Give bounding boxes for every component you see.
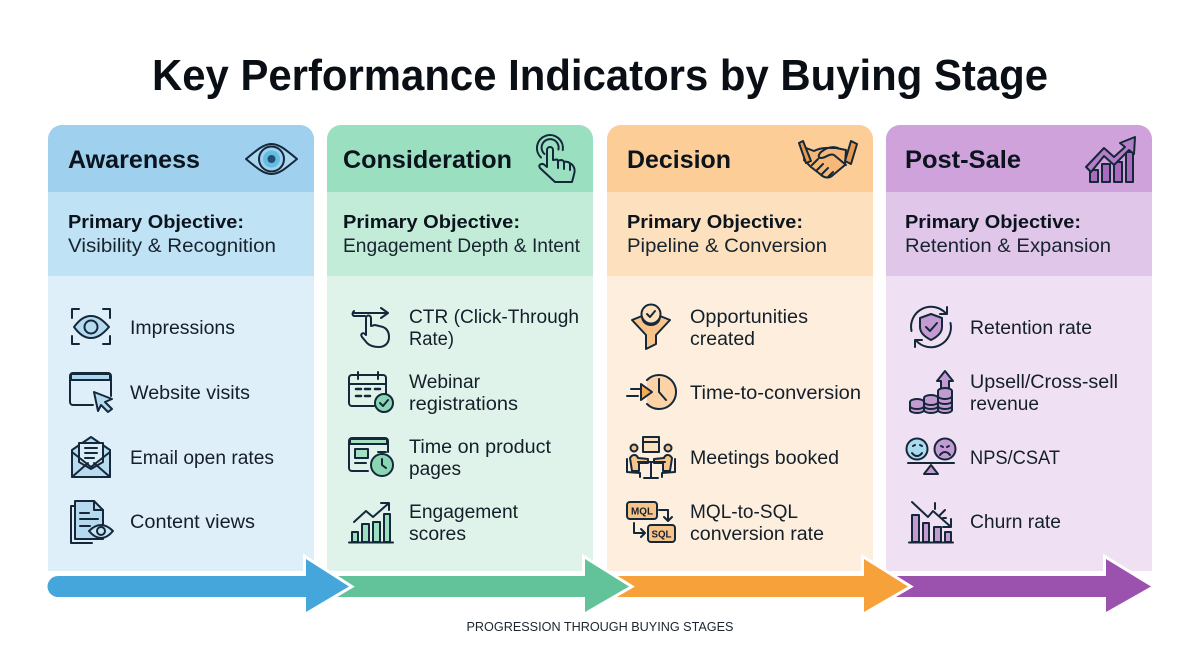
kpi: ctr: Rate) xyxy=(409,329,454,350)
icon: click arrow xyxy=(352,308,389,347)
icon: balance faces xyxy=(906,438,956,474)
kpi: engagement scores xyxy=(349,502,519,545)
kpi: meetings booked: Meetings booked xyxy=(690,448,839,469)
icon: falling chart xyxy=(909,502,953,542)
kpi: website visits: Website visits xyxy=(130,383,250,404)
kpi: email open rates: Email open rates xyxy=(130,448,274,469)
heading: post-sale: Post-Sale xyxy=(905,146,1021,174)
objective: consideration: Engagement Depth & Intent xyxy=(343,235,581,257)
kpi: time on product pages: Time on product xyxy=(409,437,552,458)
kpi: email open rates xyxy=(72,437,274,477)
kpi: mql to sql xyxy=(627,502,824,545)
objective: decision: Primary Objective: xyxy=(627,212,803,232)
icon: funnel check xyxy=(632,304,670,349)
kpi: mql to sql: MQL-to-SQL xyxy=(690,502,798,523)
icon: clock arrows xyxy=(627,375,676,409)
consideration background xyxy=(327,125,593,571)
kpi: upsell revenue xyxy=(910,371,1118,415)
icon: mql sql xyxy=(627,502,675,542)
kpi: retention rate xyxy=(911,307,1092,347)
kpi: opportunities created xyxy=(632,304,808,350)
objective: awareness: Primary Objective: xyxy=(68,212,244,232)
objective: post-sale: Retention & Expansion xyxy=(905,235,1111,257)
arrow: post-sale xyxy=(890,559,1151,612)
kpi: opportunities created: created xyxy=(690,329,755,350)
kpi: mql to sql: MQL xyxy=(631,506,654,518)
kpi: time on product pages xyxy=(349,437,552,480)
kpi: nps csat xyxy=(906,438,1060,474)
arrow: decision xyxy=(610,559,908,612)
objective: post-sale xyxy=(905,212,1111,257)
kpi: mql to sql: SQL xyxy=(652,528,672,540)
heading: awareness: Awareness xyxy=(68,146,200,174)
awareness background xyxy=(48,125,314,571)
icon: click hand xyxy=(537,135,575,182)
heading: decision: Decision xyxy=(627,146,731,174)
kpi: time to conversion xyxy=(627,375,861,409)
kpi: webinar registrations: Webinar xyxy=(409,372,481,393)
kpi: content views: Content views xyxy=(130,512,255,533)
objective: awareness xyxy=(68,212,276,257)
panel: decision xyxy=(607,125,873,571)
icon: growth chart xyxy=(1086,137,1135,182)
kpi: webinar registrations xyxy=(349,372,518,415)
heading: consideration: Consideration xyxy=(343,146,512,174)
icon: open envelope xyxy=(72,437,110,477)
icon: calendar check xyxy=(349,372,393,412)
kpi: upsell revenue: Upsell/Cross-sell xyxy=(970,372,1118,393)
icon: document eye xyxy=(71,501,113,543)
kpi: ctr: CTR (Click-Through xyxy=(409,307,579,328)
kpi: impressions: Impressions xyxy=(130,318,235,339)
icon: handshake xyxy=(799,141,857,178)
kpi: opportunities created: Opportunities xyxy=(690,307,808,328)
kpi: website visits xyxy=(70,373,250,412)
kpi: time on product pages: pages xyxy=(409,459,461,480)
icon: browser cursor xyxy=(70,373,112,412)
kpi: impressions xyxy=(72,309,235,344)
objective: post-sale: Primary Objective: xyxy=(905,212,1081,232)
icon: eye xyxy=(246,144,297,174)
kpi: churn rate xyxy=(909,502,1061,542)
kpi: engagement scores: scores xyxy=(409,524,466,545)
icon: impressions eye xyxy=(72,309,110,344)
kpi: webinar registrations: registrations xyxy=(409,394,518,415)
panel: awareness xyxy=(48,125,314,571)
kpi: churn rate: Churn rate xyxy=(970,512,1061,533)
kpi: ctr xyxy=(352,307,579,350)
objective: decision: Pipeline & Conversion xyxy=(627,235,827,257)
objective: awareness: Visibility & Recognition xyxy=(68,235,276,257)
decision background xyxy=(607,125,873,571)
arrow: awareness xyxy=(48,559,349,612)
kpi: content views xyxy=(71,501,255,543)
post-sale background xyxy=(886,125,1152,571)
caption: PROGRESSION THROUGH BUYING STAGES xyxy=(466,620,734,634)
kpi: meetings booked xyxy=(627,437,839,478)
icon: page stopwatch xyxy=(349,438,393,476)
kpi: retention rate: Retention rate xyxy=(970,318,1092,339)
kpi: engagement scores: Engagement xyxy=(409,502,519,523)
objective: consideration: Primary Objective: xyxy=(343,212,520,232)
icon: shield refresh xyxy=(911,307,951,347)
title: Key Performance Indicators by Buying Stage xyxy=(152,51,1048,100)
arrow: consideration xyxy=(330,559,629,612)
icon: coins up xyxy=(910,371,953,413)
kpi: mql to sql: conversion rate xyxy=(690,524,824,545)
panel: consideration xyxy=(327,125,593,571)
objective: decision xyxy=(627,212,827,257)
kpi: time to conversion: Time-to-conversion xyxy=(690,383,861,404)
panel: post-sale xyxy=(886,125,1152,571)
kpi: upsell revenue: revenue xyxy=(970,394,1039,415)
objective: consideration xyxy=(343,212,581,257)
icon: rising chart xyxy=(349,503,393,542)
arrow: progression xyxy=(48,559,1151,612)
kpi: nps csat: NPS/CSAT xyxy=(970,448,1060,469)
icon: meeting table xyxy=(627,437,675,478)
